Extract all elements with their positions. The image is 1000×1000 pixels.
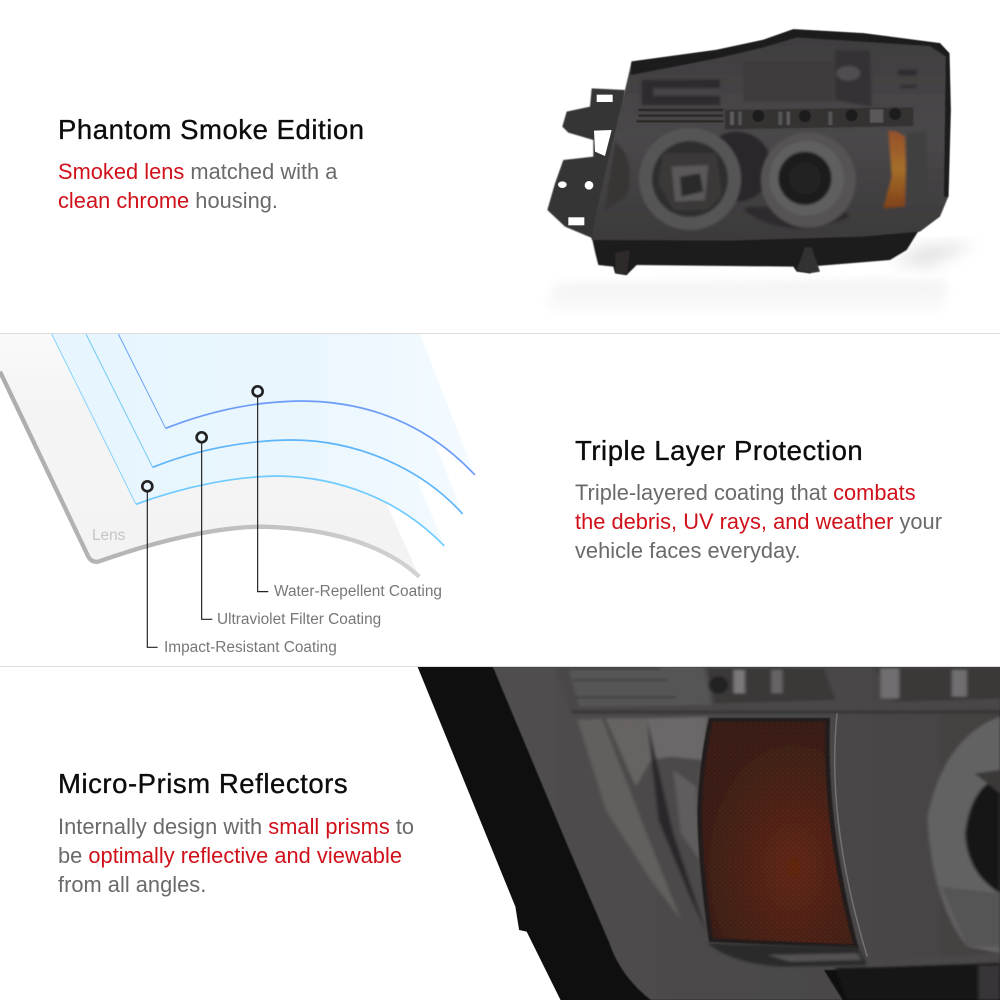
- amber marker lens: [700, 720, 856, 947]
- heading: Micro-Prism Reflectors: Micro-Prism Reflectors: [58, 768, 348, 799]
- ground shadow: [890, 243, 977, 267]
- text: Phantom Smoke description: Smoked lens matched with a: [58, 159, 337, 184]
- label: Water-Repellent Coating: Water-Repellent Coating: [274, 583, 442, 600]
- text: Micro-Prism description: Internally design with small prisms to: [58, 814, 414, 839]
- heading: Phantom Smoke Edition: Phantom Smoke Edition: [58, 114, 365, 145]
- amber turn signal: [883, 131, 927, 208]
- reflection under headlight: [548, 280, 947, 317]
- text: Triple Layer description: [575, 480, 942, 563]
- callout: ultraviolet pointer: [197, 432, 212, 619]
- lens body: [0, 334, 419, 577]
- text: Triple Layer description: the debris, UV rays, and weather your: [575, 509, 942, 534]
- grey bottom pillar: [978, 965, 1000, 1000]
- left projector: [639, 128, 772, 230]
- lower dark band: [835, 963, 1000, 1000]
- black outer rim: [418, 667, 1000, 1000]
- right chrome edge: [835, 713, 867, 957]
- lower highlight strip: [707, 943, 1000, 967]
- text: Micro-Prism description: be optimally reflective and viewable: [58, 843, 402, 868]
- water-repellent layer: [118, 334, 475, 475]
- callout: water-repellent pointer: [253, 386, 268, 592]
- text: Micro-Prism description: from all angles.: [58, 872, 206, 897]
- label: Ultraviolet Filter Coating: Ultraviolet Filter Coating: [217, 611, 381, 628]
- mounting bracket: [547, 88, 625, 240]
- text: Triple Layer description: Triple-layered coating that combats: [575, 480, 916, 505]
- side low lens: [605, 142, 630, 210]
- text: Micro-Prism description: [58, 814, 414, 897]
- photo: smoked headlight: [547, 29, 977, 317]
- mount tabs: [615, 250, 630, 275]
- clear reflector section: [577, 717, 707, 935]
- housing face: [493, 667, 1000, 1000]
- upper reflector details: [642, 50, 917, 107]
- LED strip: [725, 107, 913, 129]
- louver lines: [637, 109, 723, 122]
- text: Phantom Smoke description: clean chrome housing.: [58, 188, 278, 213]
- label: Impact-Resistant Coating: Impact-Resistant Coating: [164, 639, 337, 656]
- ultraviolet layer: [86, 334, 463, 514]
- callout: impact-resistant pointer: [142, 481, 158, 647]
- diagram: lens coatings: [0, 334, 475, 647]
- lens edge: [0, 372, 419, 577]
- impact-resistant layer: [52, 334, 444, 546]
- layer strokes: [52, 334, 475, 546]
- divider lines: [0, 334, 1000, 666]
- text: Triple Layer description: vehicle faces everyday.: [575, 538, 801, 563]
- photo: marker light close-up: [418, 667, 1000, 1000]
- lower dark base: [592, 223, 923, 275]
- housing body: [592, 29, 951, 241]
- right projector: [743, 132, 856, 228]
- upper chrome strip: [555, 667, 1000, 713]
- heading: Triple Layer Protection: Triple Layer Protection: [575, 435, 863, 466]
- label: Lens: Lens: [92, 527, 125, 544]
- right projector lens: [927, 717, 1000, 953]
- text: Phantom Smoke description: [58, 159, 338, 213]
- top dark rim: [631, 29, 951, 197]
